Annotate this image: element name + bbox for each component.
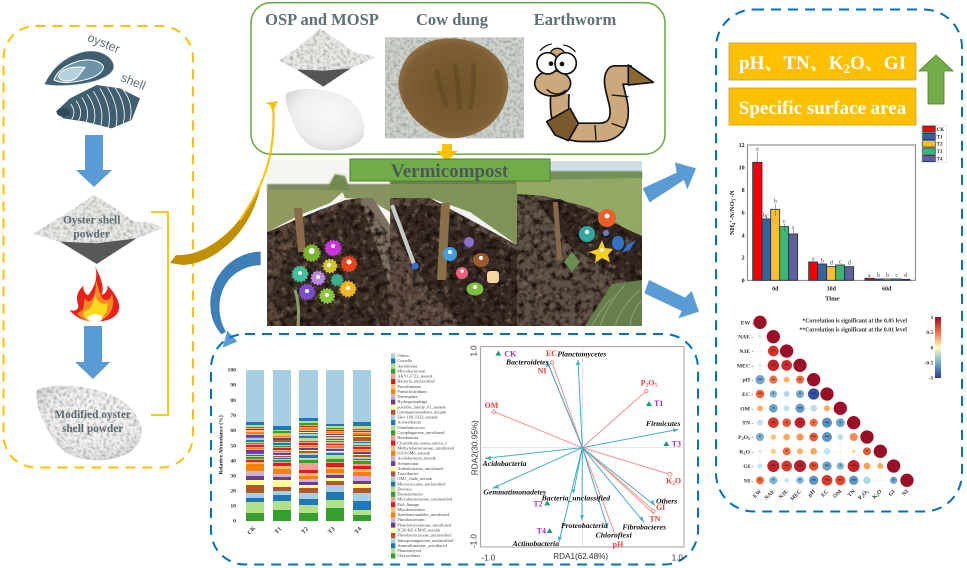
significance stars: **	[758, 392, 762, 397]
significance stars: **	[771, 420, 775, 425]
significance stars: **	[851, 478, 856, 483]
legend: genera: Acinetobacter	[397, 420, 422, 425]
legend: genera: Ornithinicoccus	[397, 425, 425, 430]
color scale: 1	[930, 315, 933, 321]
legend: genera: Dermatobacter	[397, 492, 424, 497]
stacked bar axes and legend: 10	[230, 504, 236, 510]
chart: NH4/NO3 bars: 60d	[882, 286, 892, 292]
labels: environmental factors: 5	[654, 383, 657, 389]
labels: bacterial taxa: Fibrobacteres	[622, 522, 666, 531]
legend: genera	[391, 353, 455, 559]
chart: NH4/NO3 bars: c	[895, 273, 898, 279]
legend: genera: Devosia	[397, 486, 412, 491]
labels: environmental factors: O	[675, 477, 681, 486]
labels: bacterial taxa: Others	[656, 497, 677, 506]
chart: NH4/NO3 bars: c	[792, 225, 795, 231]
arrows: environmental factors	[492, 361, 672, 535]
column labels: O	[876, 488, 884, 496]
significance stars: **	[798, 464, 802, 469]
legend: genera: Pir4_lineage	[397, 502, 419, 507]
row labels: O	[744, 435, 749, 441]
chart: NH4/NO3 bars: b	[774, 199, 777, 205]
legend: genera: Coxiella	[397, 358, 412, 363]
significance stars: *	[893, 478, 895, 483]
arrows: bacterial taxa	[485, 360, 678, 542]
row labels: TN -	[742, 421, 753, 427]
heading: vermicompost banner: Vermicompost	[391, 161, 509, 182]
labels: bacterial taxa: Bacteria_unclassified	[541, 494, 610, 503]
legend: genera: Chryseolinea	[397, 553, 420, 558]
significance stars: **	[771, 363, 775, 368]
legend: genera: Methylobacteriaceae_uncultured	[397, 445, 455, 450]
correlation circles	[753, 316, 914, 487]
bar: T4	[353, 370, 371, 521]
significance stars: **	[811, 478, 816, 483]
axis labels: RDA2(30.95%)	[470, 420, 479, 475]
labels: environmental factors	[485, 349, 681, 549]
color scale: -0.5	[924, 360, 933, 366]
labels: environmental factors: 2	[672, 481, 675, 487]
legend: genera: possible_family_01_norank	[397, 404, 446, 409]
labels: bacterial taxa: Gemmatimonadetes	[483, 488, 546, 497]
legend: genera: Microbacterium	[397, 368, 426, 373]
significance stars: **	[825, 464, 829, 469]
stacked bar axes and legend	[217, 353, 455, 559]
row labels: NI -	[744, 478, 753, 484]
labels: bacterial taxa: Actinobacteria	[512, 539, 559, 548]
legend: genera: Demequina	[397, 394, 417, 399]
photo: cow dung	[385, 37, 524, 138]
box: pH TN K2O GI: pH、TN、K	[739, 53, 844, 74]
text: modified oyster label: Modified oyster	[54, 409, 131, 421]
axis labels: 1.0	[470, 345, 479, 357]
chart: RDA biplot: T2	[533, 500, 543, 509]
labels: environmental factors: O	[648, 378, 654, 387]
labels: bacterial taxa: Firmicutes	[646, 419, 680, 428]
photo: plot three	[517, 161, 642, 326]
axis label: time: Time	[825, 295, 840, 302]
row labels: NJE -	[739, 349, 753, 355]
color scale	[924, 315, 941, 382]
significance stars: *	[759, 435, 761, 440]
significance stars: *	[799, 478, 801, 483]
labels: bacterial taxa	[482, 350, 680, 548]
significance stars: *	[839, 464, 841, 469]
icons: posts and irrigation pipe	[294, 202, 562, 280]
legend: genera: OM1_clade_norank	[397, 476, 433, 481]
significance stars: **	[758, 377, 762, 382]
row labels: OM -	[740, 406, 753, 412]
axis labels: treatments: CK	[247, 525, 257, 536]
row labels: 5	[748, 436, 750, 441]
axis label: ratio: NH	[729, 225, 736, 235]
chart: NH4/NO3 bars: 4	[742, 233, 745, 239]
column labels: K	[872, 493, 879, 501]
chart: NH4/NO3 bars: d	[830, 261, 833, 267]
arrow: blue curve to microbial panel	[210, 252, 261, 348]
bar: T3	[326, 370, 344, 521]
legend: genera: Anaerolineaceae_uncultured	[397, 543, 448, 548]
legend: genera: Gemmatimonadetes_norank	[397, 409, 447, 414]
stacked bar axes and legend: 90	[230, 383, 236, 389]
labels: environmental factors: OM	[485, 401, 499, 410]
text: shell powder label: shell powder	[62, 423, 123, 435]
icon: oyster shell	[45, 30, 148, 128]
chart: NH4/NO3 bars: 8	[742, 188, 745, 194]
chart: RDA biplot	[470, 345, 684, 562]
legend: genera: Aeromonas	[397, 363, 418, 368]
arrow: increase	[919, 55, 953, 104]
legend: treatments: T3	[937, 150, 943, 155]
heading: OSP and MOSP: OSP and MOSP	[265, 10, 379, 29]
significance stars: **	[838, 478, 842, 483]
significance stars: *	[772, 406, 774, 411]
legend: genera: Intrasporangiaceae_unclassified	[397, 538, 454, 543]
bar: CK	[246, 370, 264, 521]
note: 0.05 significance: *Correlation is significant at the 0.05 level	[802, 318, 907, 324]
chart: NH4/NO3 bars: a	[812, 257, 815, 263]
column labels: NI	[901, 488, 911, 498]
text: oyster label: oyster	[86, 30, 122, 56]
heading: cow dung: Cow dung	[416, 10, 489, 29]
color scale: 0.5	[926, 330, 933, 336]
icon: white powder	[286, 89, 364, 150]
significance stars: *	[799, 377, 801, 382]
significance stars: *	[759, 478, 761, 483]
significance stars: **	[784, 464, 789, 469]
box: specific surface area: Specific surface area	[739, 98, 907, 119]
box: pH TN K2O GI	[729, 43, 916, 80]
column labels: OM	[832, 488, 844, 500]
axis label: ratio: 3	[732, 198, 737, 201]
significance stars: **	[784, 363, 789, 368]
labels: environmental factors: NI	[538, 367, 547, 376]
significance stars: *	[786, 449, 788, 454]
legend: genera: Planctomyces	[397, 548, 422, 553]
labels: bacterial taxa: Acidobacteria	[482, 459, 527, 468]
significance stars: *	[813, 420, 815, 425]
chart: NH4/NO3 bars: b	[821, 259, 824, 265]
legend: genera: Bacteria_unclassified	[397, 379, 435, 384]
arrow: materials to vermicompost	[436, 144, 458, 161]
legend: genera: Rombouisia	[397, 435, 418, 440]
legend: treatments: T2	[937, 143, 943, 148]
stacked bar axes and legend: 20	[230, 488, 236, 494]
legend: genera: JG30-KF-CM45_norank	[397, 528, 441, 533]
legend: genera: Micrococcales_unclassified	[397, 481, 446, 486]
note: 0.01 significance: **Correlation is significant at the 0.01 level	[799, 328, 907, 334]
chart: NH4/NO3 bars: a	[868, 273, 871, 279]
icon: powder pile	[279, 28, 375, 87]
significance stars: **	[798, 406, 802, 411]
axis label: ratio: -N/NO	[729, 201, 736, 220]
chart: NH4/NO3 bars: b	[877, 273, 880, 279]
row labels: -	[750, 435, 753, 441]
significance stars: **	[825, 478, 829, 483]
chart: NH4/NO3 bars: b	[886, 273, 889, 279]
box: pH TN K2O GI: 2	[844, 61, 850, 76]
icons: microbes on plot three	[579, 209, 636, 263]
row labels: 2	[742, 436, 744, 441]
row labels: O -	[746, 449, 753, 455]
icons: small plants and grass	[295, 252, 642, 326]
chart: RDA biplot: T1	[654, 399, 663, 408]
column labels: 5	[865, 490, 870, 494]
icon: oyster shell powder	[33, 195, 163, 264]
chart: NH4/NO3 bars	[729, 125, 947, 302]
row labels: pH -	[742, 378, 753, 384]
stacked bar axes and legend: 70	[230, 413, 236, 419]
significance stars: *	[786, 420, 788, 425]
column labels: 2	[861, 494, 866, 499]
icons: microbes on plot two	[443, 237, 499, 296]
chart: NH4/NO3 bars: c	[783, 219, 786, 225]
column labels: O	[861, 490, 869, 498]
row labels: MEC -	[737, 363, 753, 369]
significance stars: *	[866, 449, 868, 454]
legend: genera: Flavobacterium	[397, 517, 425, 522]
legend: genera: Flavobacteriaceae_unclassified	[397, 533, 452, 538]
row labels: P	[738, 435, 742, 441]
legend: treatments: CK	[937, 128, 944, 133]
legend: genera: Elev-16S-1332_norank	[397, 415, 439, 420]
axis labels: -1.0	[470, 534, 479, 548]
chart: NH4/NO3 bars: 30d	[827, 286, 837, 292]
photo: plot one	[267, 160, 390, 326]
chart: NH4/NO3 bars: 12	[739, 143, 745, 149]
legend: treatments: T1	[937, 135, 943, 140]
column labels: NJE	[778, 489, 790, 501]
panel: microbial community	[211, 334, 698, 564]
significance stars: **	[771, 349, 775, 354]
significance stars: **	[798, 420, 802, 425]
chart: NH4/NO3 bars: a	[756, 146, 759, 152]
row labels: EW -	[741, 320, 753, 326]
axis label: ratio: -	[729, 197, 734, 199]
stacked bar axes and legend: 100	[228, 368, 236, 374]
labels: environmental factors: EC	[546, 349, 557, 358]
legend: genera: Acidobacteria_norank	[397, 456, 437, 461]
texture: soil clods	[267, 190, 642, 326]
row labels: 2	[744, 450, 746, 455]
labels: environmental factors: 2	[646, 383, 649, 389]
legend: genera: Pseudomonas	[397, 384, 421, 389]
significance stars: **	[851, 464, 856, 469]
column labels	[752, 488, 911, 502]
significance stars: **	[825, 420, 829, 425]
text: shell label: shell	[119, 70, 148, 93]
legend: genera: Clostridium_sensu_stricto_1	[397, 440, 447, 445]
axis labels: RDA1(62.48%)	[553, 552, 608, 561]
legend: genera: Arenimonas	[397, 461, 419, 466]
row labels: EC -	[742, 392, 753, 398]
row labels: K	[739, 449, 744, 455]
column labels: EW	[752, 489, 763, 500]
significance stars: **	[811, 464, 816, 469]
stacked bar axes and legend: 60	[230, 428, 236, 434]
column labels: MEC	[789, 489, 803, 502]
bar: T2	[299, 370, 318, 521]
column labels: P	[857, 495, 864, 501]
legend: genera: Paeniclostridium	[397, 389, 427, 394]
axis labels: -1.0	[481, 553, 496, 562]
panel: raw materials	[251, 3, 665, 154]
column labels: NAE	[764, 489, 777, 502]
icon: modified oyster shell powder	[37, 386, 142, 460]
significance stars: **	[825, 435, 829, 440]
labels: bacterial taxa: Bacteroidetes	[505, 358, 549, 367]
arrow: blue to physicochemical panel	[643, 162, 696, 202]
legend: treatments	[922, 125, 947, 162]
labels: environmental factors: K	[666, 477, 672, 486]
chart: RDA biplot: CK	[504, 350, 517, 359]
axis labels: treatments: T3	[327, 526, 337, 536]
column labels: TN	[847, 488, 857, 499]
axis label: ratio: -N	[729, 190, 736, 197]
chart: RDA biplot: T4	[537, 527, 546, 536]
legend: genera: Planctomycetaceae_uncultured	[397, 522, 452, 527]
legend: treatments: T4	[937, 157, 943, 162]
row labels: NAE -	[738, 335, 753, 341]
axis labels: 1.0	[672, 553, 683, 562]
labels: environmental factors: P	[641, 378, 646, 387]
legend: genera: Microbacteriaceae_unclassified	[397, 497, 453, 502]
icon: cartoon earthworm	[535, 44, 653, 141]
significance stars: **	[811, 435, 816, 440]
color scale: 0	[930, 345, 933, 351]
significance stars: **	[811, 392, 816, 397]
significance stars: *	[839, 420, 841, 425]
arrow: blue to correlation panel	[644, 280, 699, 318]
labels: environmental factors: GI	[656, 503, 665, 512]
column labels: 2	[875, 493, 880, 498]
panel: vermicompost photos	[267, 160, 642, 326]
legend: genera: AKYG1722_norank	[397, 374, 433, 379]
significance stars: **	[771, 464, 775, 469]
chart: NH4/NO3 bars: 6	[742, 211, 745, 217]
axis labels: treatments: T4	[354, 526, 363, 536]
box: specific surface area	[729, 88, 916, 125]
axis label: ratio: +	[729, 220, 734, 223]
labels: bacterial taxa: Planctomycetes	[557, 350, 606, 359]
legend: genera: Xanthomonadales_uncultured	[397, 512, 450, 517]
photo: plot two	[390, 160, 517, 326]
legend: genera: Mycobacterium	[397, 507, 425, 512]
stacked bar axes and legend: 0	[233, 519, 236, 525]
icon: fire	[69, 266, 119, 322]
column labels: EC	[820, 489, 830, 499]
chart: NH4/NO3 bars: bc	[763, 213, 769, 219]
axis label: ratio: 4	[732, 222, 737, 225]
significance stars: *	[772, 377, 774, 382]
significance stars	[758, 349, 895, 483]
row labels: GI -	[743, 464, 753, 470]
legend: genera: Others	[397, 353, 409, 358]
chart: NH4/NO3 bars: 0d	[772, 286, 779, 292]
significance stars: *	[799, 392, 801, 397]
arrow: gold curve powders to materials	[170, 183, 261, 265]
significance stars: *	[772, 478, 774, 483]
chart: NH4/NO3 bars: 0	[742, 278, 745, 284]
chart: stacked relative abundance bars	[246, 370, 371, 521]
arrow: powder to modified powder	[75, 326, 110, 379]
arrow: shell to powder	[76, 135, 112, 187]
axis label: relative abundance: Relative Abundance (%)	[217, 415, 224, 475]
legend: genera: Cytophagaceae_uncultured	[397, 430, 445, 435]
legend: genera: Ardenticatenia_uncultured	[397, 466, 444, 471]
axis labels: treatments: T1	[274, 526, 283, 536]
box: pH TN K2O GI: O、GI	[850, 53, 906, 74]
stacked bar axes and legend: 30	[230, 473, 236, 479]
legend: genera: 0319-6M6_norank	[397, 451, 431, 456]
bracket: powders to materials	[151, 212, 168, 415]
icons: microbes on plot one	[292, 240, 356, 303]
text: powder label: powder	[73, 229, 110, 241]
stacked bar axes and legend: 40	[230, 458, 236, 464]
panel: oyster shell preparation	[4, 26, 193, 468]
legend: genera: Hydrogenophaga	[397, 399, 427, 404]
chart: NH4/NO3 bars: d	[904, 273, 907, 279]
heading: vermicompost banner	[350, 159, 550, 182]
color scale: -1	[929, 376, 933, 382]
panel: physicochemical results	[716, 10, 962, 512]
chart: NH4/NO3 bars: 2	[742, 256, 745, 262]
column labels: GI	[888, 488, 897, 498]
axis labels: treatments	[247, 525, 363, 536]
text: oyster shell powder label: Oyster shell	[63, 214, 120, 226]
legend: genera: Turicibacter	[397, 471, 419, 476]
column labels: pH	[807, 488, 817, 498]
chart: NH4/NO3 bars: 10	[739, 166, 745, 172]
chart: NH4/NO3 bars: d	[848, 261, 851, 267]
axis labels	[470, 345, 683, 562]
stacked bar axes and legend: 80	[230, 398, 236, 404]
chart: NH4/NO3 bars: c	[839, 259, 842, 265]
labels: bacterial taxa: Proteobacteria	[561, 521, 608, 530]
row labels	[737, 320, 753, 484]
markers: treatments	[495, 351, 669, 533]
stacked bar axes and legend: 50	[230, 443, 236, 449]
labels: bacterial taxa: Chloroflexi	[596, 530, 633, 539]
significance stars: *	[772, 392, 774, 397]
labels: environmental factors: TN	[649, 515, 661, 524]
arrow: yellow curve to OSP panel	[240, 101, 278, 220]
heading: earthworm: Earthworm	[534, 10, 616, 29]
chart: RDA biplot: T3	[672, 439, 681, 448]
axis labels: treatments: T2	[301, 526, 310, 536]
labels: environmental factors: pH	[613, 540, 624, 549]
bar: T1	[273, 370, 291, 521]
chart: correlation heatmap	[737, 315, 941, 502]
